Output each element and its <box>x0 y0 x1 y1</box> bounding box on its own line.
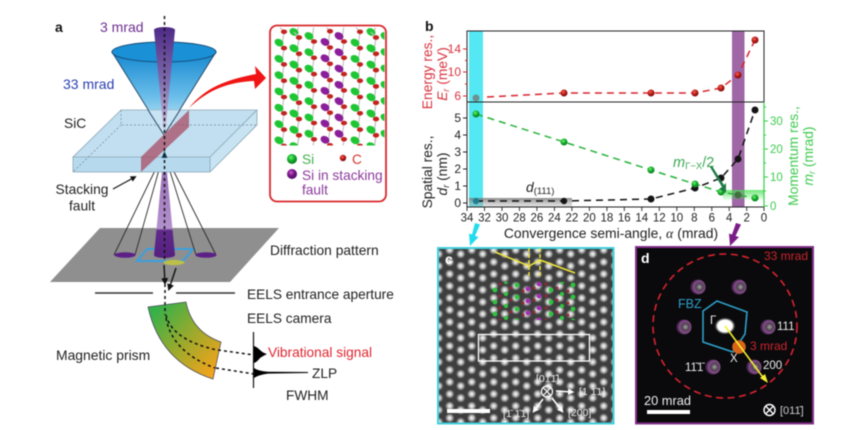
x axis tick labels: 32 <box>478 212 491 224</box>
d111 label: (111) <box>534 186 554 197</box>
label vibrational signal: Vibrational signal <box>268 345 372 360</box>
zone axis: [011̄] <box>780 405 804 417</box>
x axis tick labels: 22 <box>566 212 578 224</box>
image background <box>437 247 614 424</box>
momentum axis ticks and labels: 0 <box>770 201 776 213</box>
momentum axis ticks and labels: 10 <box>770 172 783 184</box>
pointers through aperture <box>164 265 176 289</box>
legend: C: C <box>352 152 362 167</box>
panel label b: b <box>425 18 434 34</box>
label magnetic prism: Magnetic prism <box>56 347 150 363</box>
slab waist <box>162 151 168 158</box>
atom columns <box>437 247 614 424</box>
diffraction discs <box>114 252 216 258</box>
central beam <box>714 318 736 334</box>
x axis tick labels <box>461 212 767 224</box>
electron paths <box>165 284 254 374</box>
label 33 mrad: 33 mrad <box>63 76 114 92</box>
orientation axes: [1 1̄1] <box>579 386 605 398</box>
arrow to momentum band <box>710 166 726 193</box>
panel c: atomic resolution image <box>437 247 614 424</box>
x axis tick labels: 10 <box>670 212 683 224</box>
panel label a: a <box>55 19 63 35</box>
inset: SiC crystal structure <box>270 16 393 202</box>
x axis tick labels: 24 <box>548 212 561 224</box>
overlaid lattice model <box>490 282 580 320</box>
panel label d: d <box>641 250 650 266</box>
blue hexagon on diffraction plane <box>137 249 193 261</box>
label SiC: SiC <box>64 116 86 131</box>
reciprocal labels: Γ <box>710 315 717 327</box>
m gamma-x label: /2 <box>702 155 714 171</box>
cyan arrow <box>469 223 480 246</box>
beam axis dashes <box>164 16 166 262</box>
spatial axis ticks and labels: 4 <box>454 128 461 142</box>
spatial axis title: (nm) <box>435 153 450 185</box>
panel d: diffraction pattern image <box>635 246 814 424</box>
label 3 mrad: 3 mrad <box>750 339 787 353</box>
atomic lattice <box>274 27 386 146</box>
selection rectangle <box>478 334 590 361</box>
x axis tick labels: 28 <box>513 212 526 224</box>
momentum axis title: Momentum res., <box>786 106 801 206</box>
x axis tick labels: 20 <box>583 212 596 224</box>
m gamma-x label: Γ−X <box>685 161 703 172</box>
panel a: EELS experimental schematic <box>50 16 394 403</box>
arrow to stacking fault <box>113 177 135 189</box>
33 mrad circle <box>653 254 797 398</box>
m gamma-x label: m <box>673 155 685 171</box>
momentum band <box>723 190 764 200</box>
momentum axis ticks and labels <box>764 107 783 213</box>
yellow stacking lines <box>495 248 575 277</box>
spatial axis title: Spatial res., <box>420 136 435 208</box>
momentum axis title: (mrad) <box>801 127 816 171</box>
EELS entrance aperture <box>95 292 235 294</box>
spatial axis ticks and labels <box>454 111 467 210</box>
reciprocal labels: X <box>730 353 738 365</box>
scale bar <box>447 409 490 413</box>
spatial axis title: r <box>441 184 451 188</box>
zone axis <box>764 404 804 417</box>
scale bar and label: 20 mrad <box>644 393 691 408</box>
x axis tick labels: 14 <box>635 212 649 224</box>
x axis ticks <box>467 207 764 211</box>
magnetic prism <box>148 302 221 379</box>
spatial series <box>473 106 758 204</box>
legend: Si in stacking fault: Si in stacking <box>302 168 383 183</box>
momentum axis ticks and labels: 30 <box>770 116 783 128</box>
cone top ellipse <box>112 42 216 62</box>
stacking fault plane <box>141 110 189 172</box>
yellow detector disc <box>164 260 184 265</box>
label FWHM: FWHM <box>286 388 329 403</box>
momentum axis ticks and labels: 20 <box>770 144 783 156</box>
momentum series <box>472 110 758 202</box>
spectrum axis and peaks <box>254 332 308 388</box>
reciprocal labels: 111 <box>777 321 794 333</box>
energy axis title: Energy res., <box>420 35 435 109</box>
d111 band <box>469 198 572 207</box>
x axis tick labels: 2 <box>743 212 750 224</box>
lower diffracted cones <box>114 152 216 255</box>
spatial axis title: d <box>435 186 450 195</box>
first Brillouin zone <box>703 301 747 352</box>
label camera: EELS camera <box>247 311 332 326</box>
yellow momentum arrow <box>725 326 768 383</box>
orientation axes <box>503 373 605 420</box>
cyan band <box>469 31 483 207</box>
label FBZ: FBZ <box>678 297 702 311</box>
energy axis title: r <box>441 88 451 92</box>
orientation axes: [1̄ 1̄1̄] <box>503 408 529 420</box>
x axis tick labels: 0 <box>761 212 767 224</box>
energy axis title: E <box>435 91 450 101</box>
x axis tick labels: 8 <box>691 212 698 224</box>
legend: Si in stacking fault: fault <box>302 182 328 198</box>
purple arrow <box>729 223 741 246</box>
energy axis ticks and labels <box>448 42 467 103</box>
spatial axis ticks and labels: 1 <box>454 179 461 193</box>
energy axis ticks and labels: 6 <box>454 89 461 103</box>
d111 label: d <box>526 180 535 195</box>
label 33 mrad: 33 mrad <box>764 249 808 263</box>
label stacking fault: fault <box>69 198 95 214</box>
energy series <box>472 36 758 102</box>
orientation axes: [200] <box>568 407 591 419</box>
energy axis ticks and labels: 14 <box>448 42 461 56</box>
energy axis ticks and labels: 10 <box>448 65 461 79</box>
label 3 mrad: 3 mrad <box>100 19 144 35</box>
reciprocal labels: 200 <box>763 360 782 372</box>
image background <box>635 246 814 424</box>
panel label c: c <box>445 251 453 267</box>
3 mrad aperture spot <box>732 340 746 354</box>
label diffraction pattern: Diffraction pattern <box>270 243 379 258</box>
diffraction plane <box>50 228 279 282</box>
label ZLP: ZLP <box>312 366 337 381</box>
x axis tick labels: 34 <box>461 212 474 224</box>
spatial axis ticks and labels: 5 <box>454 111 461 125</box>
x axis tick labels: 26 <box>531 212 543 224</box>
x axis tick labels: 30 <box>496 212 508 224</box>
reciprocal labels <box>685 315 794 374</box>
image border <box>438 248 614 424</box>
spatial axis ticks and labels: 0 <box>454 196 461 210</box>
orientation axes: [01̄1̄] <box>536 373 559 385</box>
label aperture: EELS entrance aperture <box>247 287 394 302</box>
SiC slab <box>73 110 257 172</box>
reciprocal labels: 11̄1̄ <box>685 362 705 374</box>
x axis tick labels: 4 <box>726 212 733 224</box>
red curved arrow <box>189 66 266 108</box>
purple band <box>732 31 744 207</box>
x axis tick labels: 12 <box>653 212 666 224</box>
lower purple beam <box>154 152 175 258</box>
legend: Si: Si <box>302 152 314 167</box>
label stacking fault: Stacking <box>56 182 108 197</box>
panel b: resolution chart <box>420 18 817 246</box>
inset frame <box>270 26 386 202</box>
x axis tick labels: 16 <box>618 212 631 224</box>
legend: Si <box>287 152 314 167</box>
x axis title: Convergence semi-angle, α (mrad) <box>504 225 718 242</box>
plot frame <box>467 31 764 207</box>
upper purple beam <box>154 27 175 135</box>
x axis tick labels: 6 <box>709 212 715 224</box>
momentum axis title: r <box>807 170 817 174</box>
diffraction spots <box>676 280 776 374</box>
blue cone <box>112 52 216 135</box>
legend: C <box>340 152 362 167</box>
legend: Si in stacking fault <box>287 168 383 198</box>
momentum axis title: m <box>801 174 816 185</box>
cone crossing above slab <box>148 110 180 135</box>
panel border <box>636 247 813 424</box>
spatial axis ticks and labels: 3 <box>454 145 461 159</box>
energy axis title: (meV) <box>435 47 450 89</box>
spatial axis ticks and labels: 2 <box>454 162 461 176</box>
x axis tick labels: 18 <box>601 212 613 224</box>
